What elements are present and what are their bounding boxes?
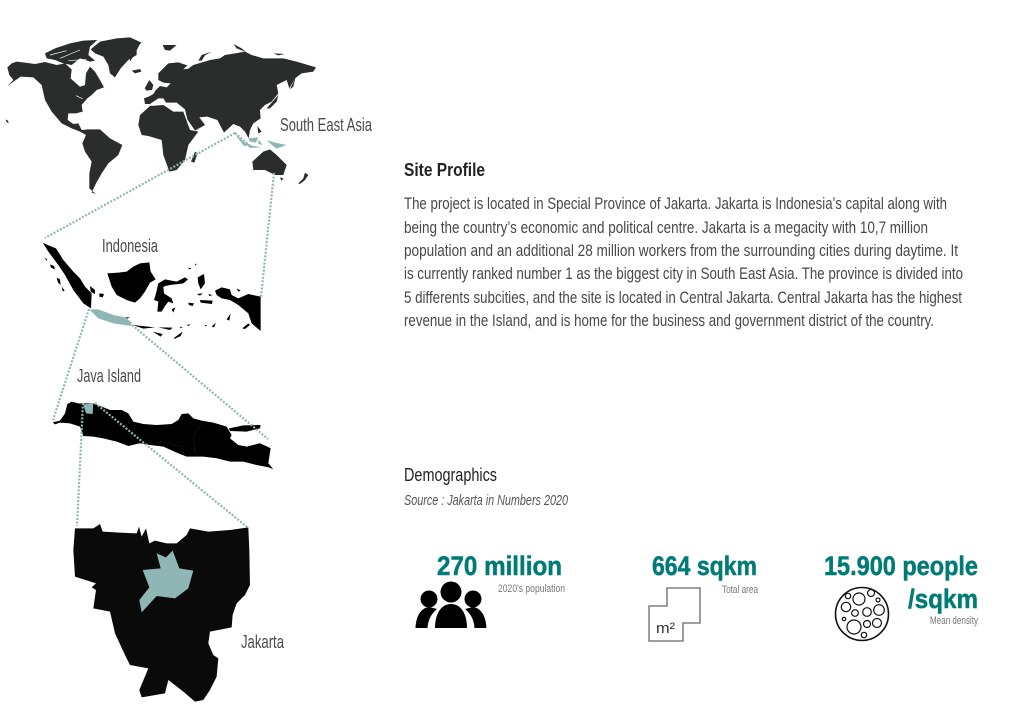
map: americas and arctic <box>5 37 142 194</box>
stat: total area: 664 sqkm <box>652 551 757 581</box>
map: jakarta highlight in java <box>83 403 93 414</box>
stat: mean density: Mean density <box>930 615 978 627</box>
map: java highlight <box>89 309 132 326</box>
map: world <box>5 37 316 194</box>
icon: area m2: m² <box>656 620 675 637</box>
dotted connector lines <box>45 133 274 527</box>
text block: site profile description <box>404 194 963 330</box>
icon: density circle <box>836 588 888 640</box>
label: Jakarta: Jakarta <box>241 632 285 652</box>
map: south east asia highlight <box>236 134 287 149</box>
map: java island <box>53 402 273 469</box>
stat: population: 2020's population <box>498 583 565 595</box>
map: eurasia africa oceania <box>130 40 316 184</box>
stat: mean density: 15.900 people <box>824 551 978 581</box>
icon: people <box>416 582 486 628</box>
stat: total area <box>649 551 759 641</box>
stat: population <box>416 551 565 628</box>
map: central jakarta highlight <box>139 551 193 612</box>
label: South East Asia: South East Asia <box>280 115 373 135</box>
heading: Site Profile: Site Profile <box>404 160 485 180</box>
stat: mean density: /sqkm <box>908 584 978 614</box>
map: jakarta <box>73 524 250 702</box>
stat: mean density <box>824 551 978 640</box>
map: indonesia <box>43 243 261 339</box>
stat: population: 270 million <box>437 551 562 581</box>
stat: total area: Total area <box>722 584 759 596</box>
label: Java Island: Java Island <box>77 366 141 386</box>
heading: Demographics: Demographics <box>404 465 497 485</box>
source note: Source : Jakarta in Numbers 2020 <box>404 492 568 509</box>
label: Indonesia: Indonesia <box>102 236 159 256</box>
